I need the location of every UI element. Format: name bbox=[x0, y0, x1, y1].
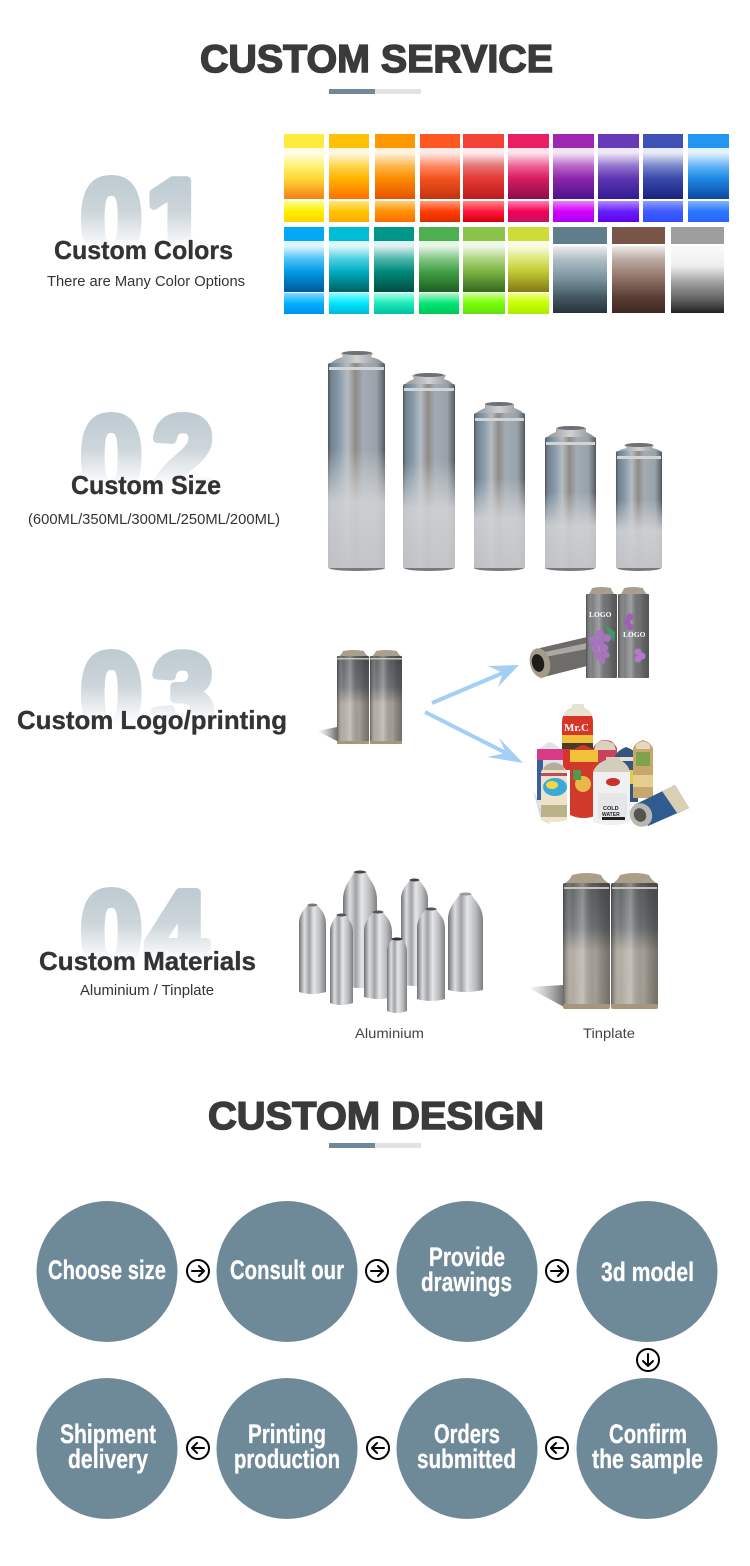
can white: COLD bbox=[603, 806, 619, 812]
swatch: deep orange bbox=[420, 134, 460, 222]
caption: tinplate: Tinplate bbox=[583, 1025, 635, 1041]
image: blank tin cans bbox=[317, 650, 402, 744]
number 02: 2 bbox=[153, 395, 214, 519]
upright can one: LOGO bbox=[589, 610, 612, 619]
subheading: sizes: (600ML/350ML/300ML/250ML/200ML) bbox=[28, 512, 280, 528]
step 1: choose size: Choose size bbox=[48, 1255, 166, 1285]
number 01: 1 bbox=[146, 158, 207, 282]
swatch: red bbox=[463, 134, 504, 222]
swatch: teal bbox=[374, 227, 414, 314]
bottle centre bbox=[364, 910, 392, 999]
bottle far left bbox=[299, 904, 326, 994]
step 8: shipment delivery bbox=[36, 1378, 178, 1519]
swatch: grey bbox=[671, 227, 724, 313]
upright can two: LOGO bbox=[623, 630, 646, 639]
title underline bbox=[329, 89, 421, 94]
step 7: printing production: Printing bbox=[248, 1419, 326, 1449]
can pink bbox=[537, 742, 563, 808]
heading: custom size: Custom Size bbox=[71, 470, 221, 500]
arrow right 1 bbox=[187, 1260, 209, 1282]
can tall red bbox=[562, 704, 593, 770]
swatch: blue bbox=[688, 134, 729, 222]
swatch: amber bbox=[329, 134, 369, 222]
number 03: 0 bbox=[81, 632, 142, 756]
image: tinplate cans bbox=[527, 873, 658, 1009]
can lying blue bbox=[626, 785, 689, 831]
number 04: 0 bbox=[81, 870, 142, 994]
step 8: shipment delivery: Shipment bbox=[60, 1419, 156, 1449]
step 2: consult our: Consult our bbox=[230, 1255, 344, 1285]
heading: custom colors: Custom Colors bbox=[54, 235, 233, 265]
can red front bbox=[570, 745, 598, 818]
bottle second bbox=[330, 914, 353, 1005]
arrow right 2 bbox=[366, 1260, 388, 1282]
step 1: choose size bbox=[36, 1201, 178, 1342]
caption: aluminium: Aluminium bbox=[355, 1025, 424, 1041]
bottle back right bbox=[401, 878, 428, 986]
design title underline bbox=[329, 1143, 421, 1148]
number 01 bbox=[81, 158, 207, 282]
can 600ml bbox=[328, 351, 385, 571]
swatch: orange bbox=[375, 134, 415, 222]
step 6: orders submitted: Orders bbox=[434, 1419, 500, 1449]
swatch: yellow bbox=[284, 134, 324, 222]
color palette chart bbox=[284, 134, 729, 314]
arrow left 2 bbox=[367, 1437, 389, 1459]
step 3: provide drawings: Provide bbox=[429, 1242, 505, 1272]
panel: custom logo text bbox=[17, 632, 287, 756]
shadow bbox=[317, 727, 337, 741]
number 03: 3 bbox=[153, 632, 214, 756]
lying can bbox=[527, 637, 587, 680]
swatch: purple bbox=[553, 134, 594, 222]
step 5: confirm the sample bbox=[576, 1378, 718, 1519]
bottle front bbox=[387, 938, 407, 1013]
can right bbox=[611, 873, 658, 1009]
can white bbox=[593, 757, 630, 825]
can 350ml bbox=[403, 373, 455, 571]
swatch: pink bbox=[508, 134, 549, 222]
step 7: printing production bbox=[216, 1378, 358, 1519]
title: custom design: CUSTOM DESIGN bbox=[208, 1095, 544, 1138]
image: five silver cans by size bbox=[328, 351, 662, 571]
number 03 bbox=[81, 632, 214, 756]
step 8: shipment delivery: delivery bbox=[68, 1444, 148, 1474]
arrow left 1 bbox=[546, 1437, 568, 1459]
swatch: brown bbox=[612, 227, 665, 313]
number 02: 0 bbox=[81, 395, 142, 519]
can blue back bbox=[615, 747, 638, 802]
can tall red: Mr.C bbox=[564, 722, 589, 734]
arrow: to logo cans bbox=[432, 665, 519, 703]
swatch: light green bbox=[463, 227, 505, 314]
number 04: 4 bbox=[146, 870, 207, 994]
heading: custom logo: Custom Logo/printing bbox=[17, 705, 287, 735]
step 6: orders submitted bbox=[396, 1378, 538, 1519]
arrow down bbox=[637, 1349, 659, 1371]
heading: custom materials: Custom Materials bbox=[39, 946, 256, 976]
step 2: consult our bbox=[216, 1201, 358, 1342]
can right bbox=[370, 650, 402, 744]
bottle far right bbox=[448, 892, 483, 992]
arrow left 3 bbox=[187, 1437, 209, 1459]
swatch: indigo bbox=[643, 134, 683, 222]
shadow bbox=[533, 790, 550, 824]
bottle back tall bbox=[343, 870, 377, 988]
subheading: materials: Aluminium / Tinplate bbox=[80, 983, 214, 999]
step 7: printing production: production bbox=[234, 1444, 340, 1474]
number 02 bbox=[81, 395, 214, 519]
can 300ml bbox=[474, 402, 525, 571]
swatch: cyan bbox=[329, 227, 369, 314]
can 200ml bbox=[616, 443, 662, 571]
swatch: deep purple bbox=[598, 134, 639, 222]
step 5: confirm the sample: the sample bbox=[592, 1444, 703, 1474]
step 3: provide drawings: drawings bbox=[421, 1267, 512, 1297]
number 01: 0 bbox=[81, 158, 142, 282]
shadow bbox=[527, 985, 564, 1007]
arrow: to printed cans bbox=[425, 712, 523, 763]
can 250ml bbox=[545, 426, 596, 571]
step 6: orders submitted: submitted bbox=[417, 1444, 516, 1474]
can gold bbox=[633, 740, 653, 798]
subheading: colors: There are Many Color Options bbox=[47, 274, 245, 290]
image: printed cans group bbox=[533, 704, 689, 831]
can left bbox=[337, 650, 369, 744]
swatch: lime bbox=[508, 227, 549, 314]
can white: WATER bbox=[602, 812, 620, 818]
panel: custom colors text bbox=[47, 158, 245, 290]
number 04 bbox=[81, 870, 207, 994]
panel: custom size text bbox=[28, 395, 280, 528]
swatch: green bbox=[419, 227, 459, 314]
step 4: 3d model: 3d model bbox=[601, 1257, 694, 1287]
swatch: light blue bbox=[284, 227, 324, 314]
step 5: confirm the sample: Confirm bbox=[609, 1419, 687, 1449]
can small red back bbox=[593, 740, 617, 790]
can left bbox=[563, 873, 610, 1009]
title: custom service: CUSTOM SERVICE bbox=[200, 38, 553, 81]
panel: custom materials text bbox=[39, 870, 256, 999]
arrow right 3 bbox=[546, 1260, 568, 1282]
step 4: 3d model bbox=[576, 1201, 718, 1342]
bottle right centre bbox=[417, 908, 445, 1001]
swatch: blue grey bbox=[553, 227, 607, 313]
step 3: provide drawings bbox=[396, 1201, 538, 1342]
can colorful front bbox=[541, 762, 567, 822]
image: aluminium bottles bbox=[299, 870, 483, 1013]
image: cans with logo bbox=[527, 587, 649, 680]
